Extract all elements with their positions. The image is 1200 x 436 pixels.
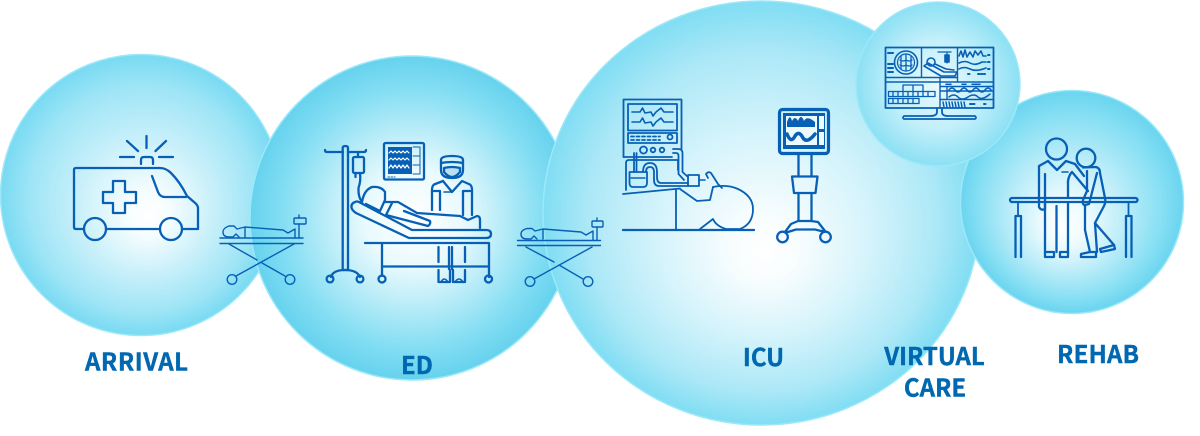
- circle: ED: [250, 56, 574, 380]
- circle: rehab: [960, 90, 1184, 314]
- label: arrival: ARRIVAL: [84, 342, 188, 378]
- label: rehab: REHAB: [1057, 335, 1139, 370]
- IV pole: [325, 146, 366, 282]
- icon: ambulance: [74, 136, 198, 240]
- circle: arrival: [0, 54, 282, 336]
- wall monitor: [384, 143, 424, 180]
- keypad tile: [888, 85, 935, 104]
- therapist: [1039, 138, 1088, 257]
- waveform tile: [959, 50, 990, 74]
- parallel bars: [1010, 198, 1138, 257]
- icon: stretcher between arrival and ED: [220, 215, 306, 284]
- ventilator: [624, 100, 705, 190]
- patient: [1077, 149, 1115, 257]
- icon: rehab with therapist and parallel bars: [1010, 138, 1138, 257]
- patient: [362, 187, 480, 228]
- label: virtual care: CARE: [904, 368, 966, 404]
- icon: monitor on stand: [777, 110, 831, 242]
- label: ED: ED: [401, 346, 433, 381]
- label: virtual care: VIRTUAL: [883, 337, 985, 372]
- patient tile: [924, 52, 957, 76]
- circle: virtual care: [856, 2, 1020, 166]
- icon: ED patient bed with IV and clinician: [325, 143, 492, 282]
- icon: stretcher between ED and ICU: [518, 218, 603, 286]
- clinician: [432, 156, 472, 282]
- operating table and patient: [623, 172, 754, 230]
- label: ICU: ICU: [743, 338, 784, 373]
- circle: ICU: [543, 1, 980, 425]
- vital signs tile: [943, 84, 991, 107]
- icon: virtual care monitor wall: [886, 48, 994, 119]
- icon: ventilated patient: [623, 100, 754, 230]
- bed: [351, 202, 492, 282]
- brain tile: [888, 51, 918, 74]
- stand: [903, 108, 976, 119]
